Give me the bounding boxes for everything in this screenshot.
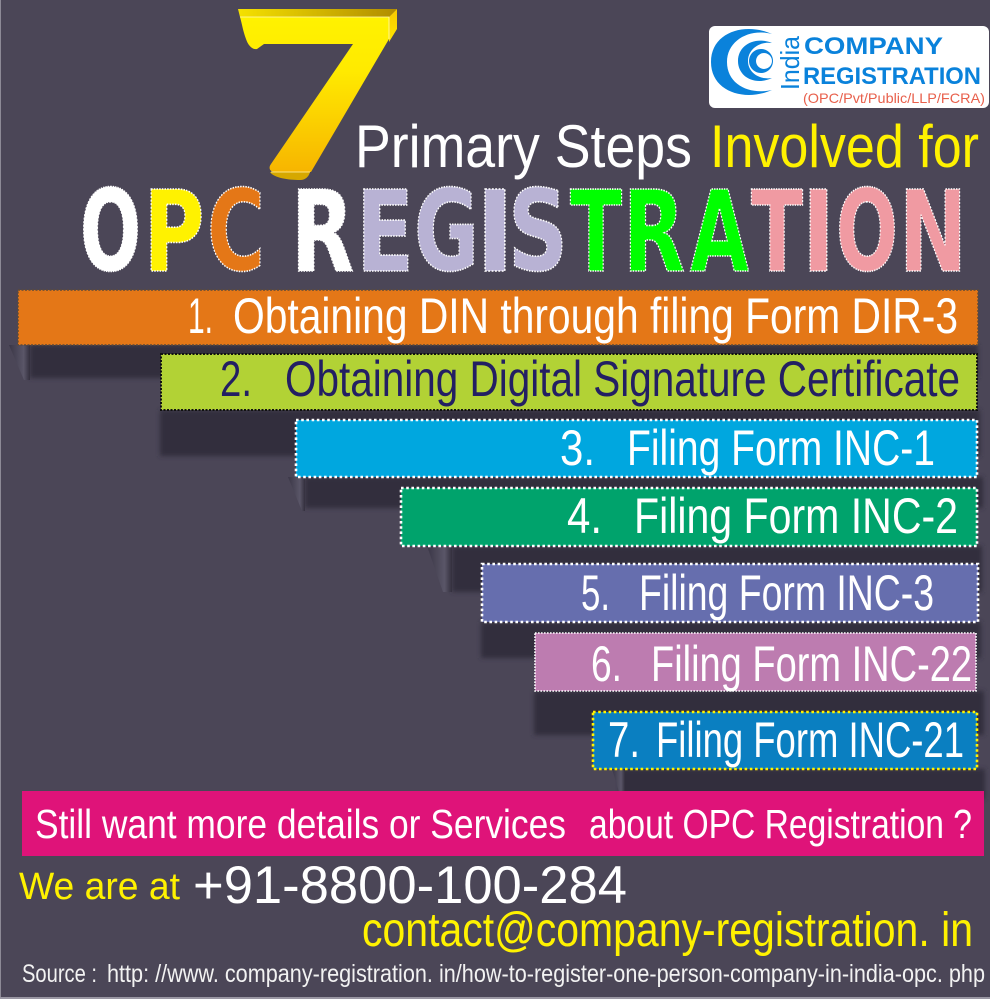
icon: swirl: [711, 29, 773, 95]
big number 7: [238, 9, 397, 180]
step 5 bar: [482, 564, 978, 622]
logo: India Company Registration: India: [775, 35, 805, 90]
step 5 bar: 5.: [581, 565, 610, 621]
title: OPC REGISTRATION: A: [690, 168, 749, 298]
title: OPC REGISTRATION: G: [414, 167, 479, 297]
title: OPC REGISTRATION: T: [751, 168, 803, 298]
step 6 bar: 6.: [591, 636, 622, 692]
title: OPC REGISTRATION: T: [570, 168, 622, 298]
title: OPC REGISTRATION: O: [80, 167, 141, 297]
title: OPC REGISTRATION: R: [291, 168, 354, 298]
step 3 bar: 3.: [560, 420, 595, 476]
title: OPC REGISTRATION: N: [899, 168, 967, 298]
logo: India Company Registration: REGISTRATION: [803, 63, 981, 90]
title: OPC REGISTRATION: P: [144, 168, 204, 298]
source line: Source :: [22, 960, 97, 988]
callout: more details: [22, 791, 984, 856]
step 4 bar: 4.: [567, 488, 602, 544]
heading line: Primary Steps Involved for: [355, 113, 979, 180]
title: OPC REGISTRATION: E: [356, 168, 414, 298]
logo: India Company Registration: (OPC/Pvt/Public/LLP/FCRA): [803, 90, 985, 106]
contact: we are at: We are at: [19, 866, 180, 908]
heading line: Primary Steps Involved for: Primary Steps: [355, 113, 692, 180]
title: OPC REGISTRATION: O: [836, 167, 898, 297]
title: OPC REGISTRATION: I: [476, 168, 514, 298]
step 7 bar: 7.: [608, 712, 640, 768]
step 2 bar: 2.: [220, 351, 252, 407]
step 3 bar: [296, 420, 977, 477]
title: OPC REGISTRATION: R: [623, 168, 685, 298]
step 4 bar: [401, 488, 977, 546]
title: OPC REGISTRATION: S: [508, 167, 568, 297]
contact: phone number: +91-8800-100-284: [193, 856, 627, 915]
staircase shadows: [9, 345, 985, 799]
step 1 bar: 1.: [188, 288, 213, 344]
logo: India Company Registration: COMPANY: [804, 33, 943, 60]
title: OPC REGISTRATION: I: [802, 168, 835, 298]
title: OPC REGISTRATION: [80, 167, 967, 298]
logo: India Company Registration: [709, 26, 989, 108]
title: OPC REGISTRATION: C: [207, 167, 265, 297]
callout: more details: Still want more details or Services: [35, 801, 566, 847]
step 6 bar: [535, 633, 976, 692]
